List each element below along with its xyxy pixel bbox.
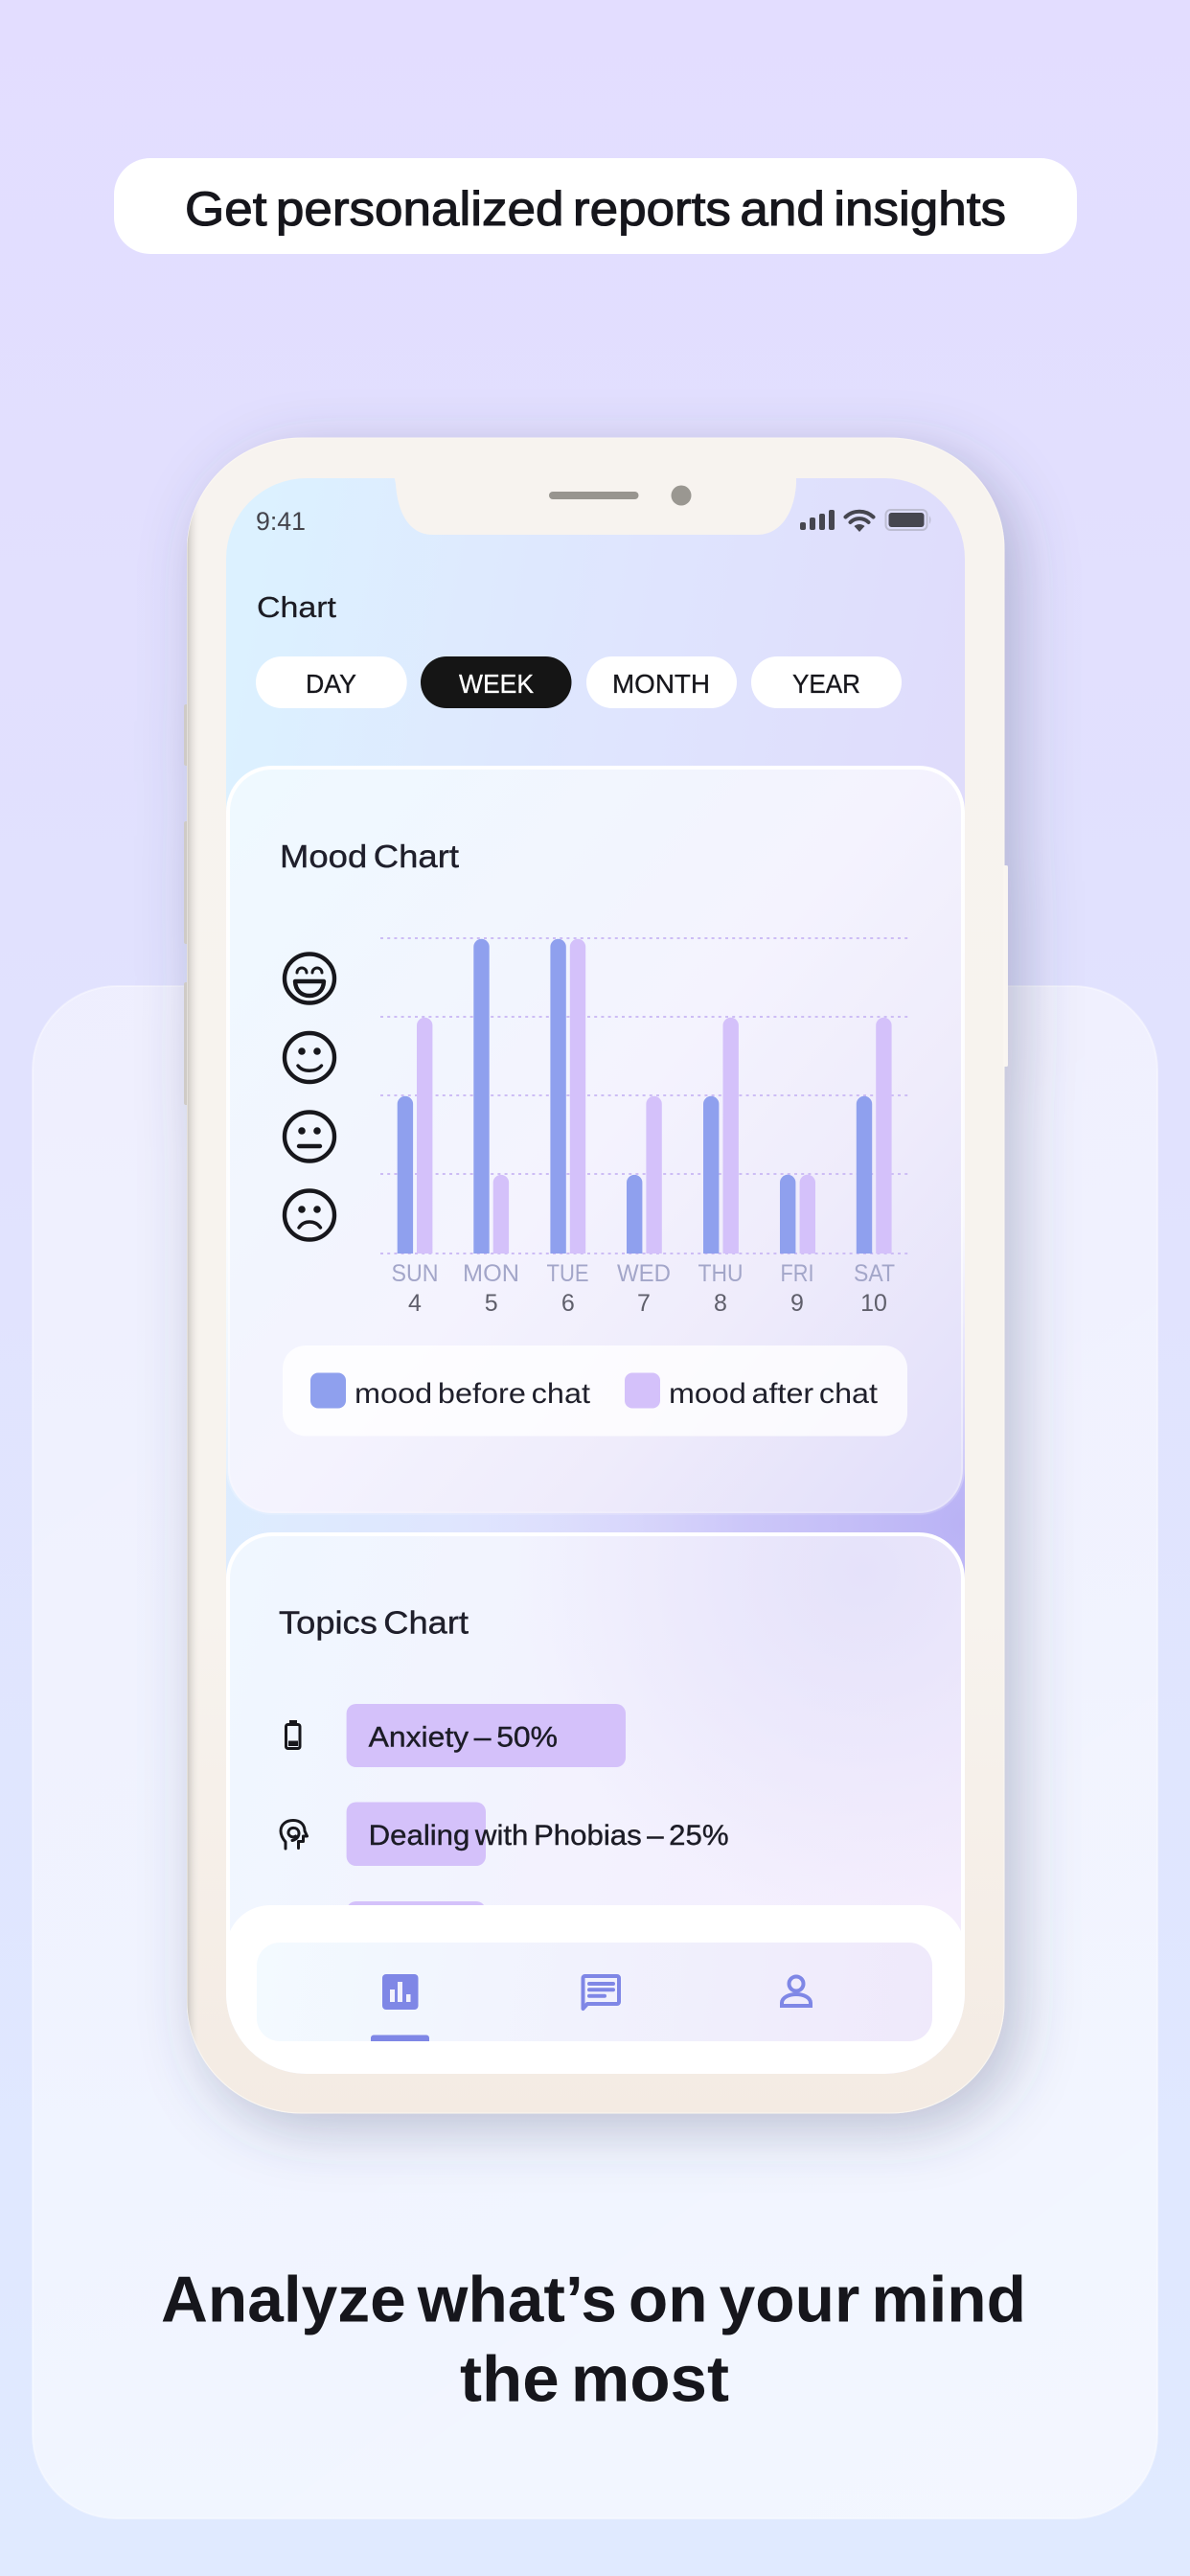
axis date labels: 8 [714, 1290, 727, 1317]
axis day labels: SUN [391, 1260, 439, 1287]
phone side buttons [184, 438, 1008, 2113]
heading: chart: Chart [257, 590, 336, 624]
axis day labels [393, 1264, 895, 1281]
icon: smiling face [285, 1033, 334, 1082]
topic bar: anxiety: Anxiety – 50% [369, 1722, 558, 1754]
axis date labels [408, 1294, 886, 1311]
icon: chat tab [583, 1976, 619, 2009]
bottom headline: Analyze what’s on your mind [161, 2264, 1026, 2336]
tab: month [586, 656, 737, 708]
top caption pill: Get personalized reports and insights [185, 182, 1006, 236]
phone notch [394, 474, 796, 535]
legend: mood before chat [355, 1378, 591, 1410]
icon: profile tab [782, 1976, 811, 2006]
speaker [549, 492, 638, 499]
icon: sad face [285, 1190, 334, 1240]
tab: month: MONTH [612, 669, 710, 699]
axis day labels: SAT [854, 1260, 895, 1287]
topic bar: dealing with phobias: Dealing with Phobias – 25% [369, 1820, 729, 1852]
axis date labels: 6 [561, 1290, 575, 1317]
bottom navigation bar [230, 1905, 961, 2074]
status bar time: 9:41 [256, 507, 306, 536]
mood icons [285, 954, 334, 1240]
topic bar: clipped third row [349, 1901, 484, 1905]
tab: week selected [421, 656, 571, 708]
tab: year [751, 656, 902, 708]
panel: topics chart card [226, 1532, 965, 2015]
icon: neutral face [285, 1112, 334, 1162]
legend: mood after chat [669, 1378, 879, 1410]
panel: mood chart card [228, 768, 963, 1513]
top caption pill [114, 158, 1077, 254]
period tabs [256, 656, 902, 708]
axis date labels: 10 [860, 1290, 887, 1317]
bars: mood after chat [417, 939, 892, 1254]
axis date labels: 7 [637, 1290, 651, 1317]
icon: laughing face [285, 954, 334, 1002]
camera [671, 485, 692, 506]
axis date labels: 4 [408, 1290, 422, 1317]
bottom headline [161, 2264, 1026, 2415]
topic bar: dealing with phobias [347, 1802, 729, 1866]
tab: week selected: WEEK [459, 669, 534, 699]
axis date labels: 5 [485, 1290, 498, 1317]
active tab indicator [371, 2036, 429, 2041]
phone screen [226, 478, 965, 2148]
bar chart: mood before and after chat [380, 938, 908, 1317]
status bar icons [800, 510, 931, 532]
icon: chart tab [382, 1974, 418, 2010]
heading: mood chart: Mood Chart [280, 839, 459, 874]
icon: head with spiral [281, 1821, 307, 1849]
tab: day: DAY [306, 669, 356, 699]
heading: topics chart: Topics Chart [279, 1604, 469, 1641]
background panel [33, 986, 1157, 2518]
axis day labels: THU [698, 1260, 744, 1287]
bottom headline: the most [460, 2342, 729, 2415]
axis day labels: FRI [780, 1260, 814, 1287]
tab: day [256, 656, 407, 708]
tab: year: YEAR [792, 669, 860, 699]
axis day labels: MON [463, 1260, 519, 1287]
icon: battery [286, 1720, 300, 1748]
bars: mood before chat [398, 939, 872, 1254]
legend [283, 1346, 907, 1436]
axis date labels: 9 [790, 1290, 804, 1317]
axis day labels: TUE [546, 1260, 588, 1287]
topic bar: anxiety [347, 1704, 626, 1767]
axis day labels: WED [617, 1260, 671, 1287]
phone mockup [184, 438, 1008, 2148]
